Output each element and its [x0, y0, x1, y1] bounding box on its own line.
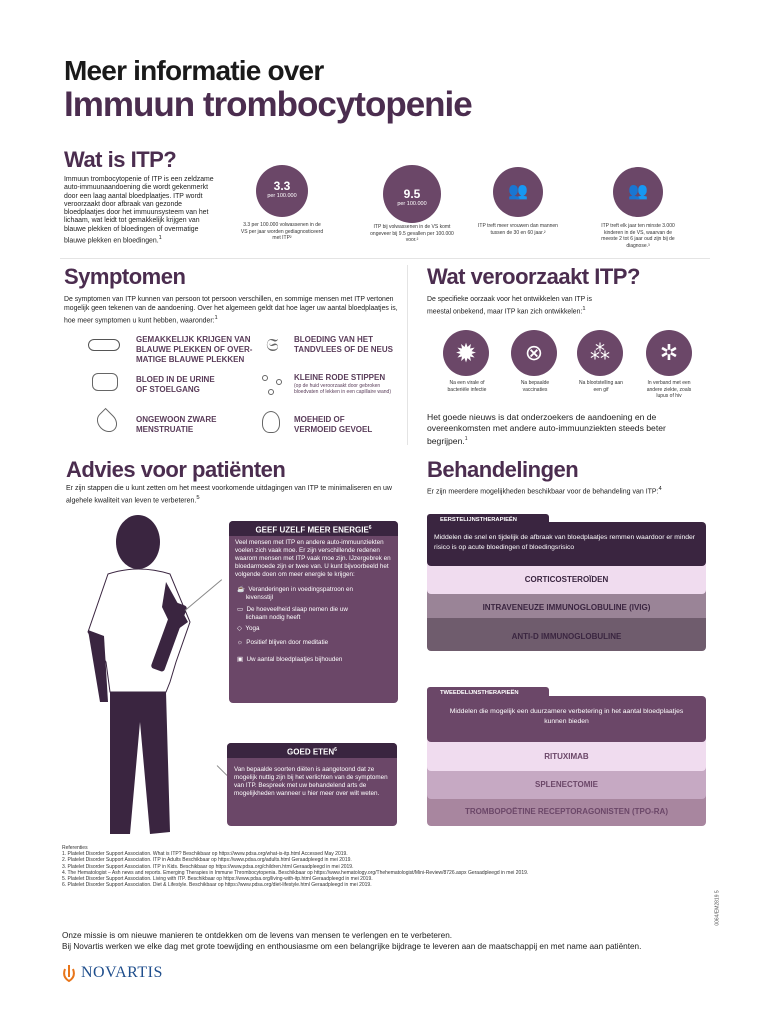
text: ITP definition: Immuun trombocytopenie of ITP is een zeldzame auto-immuunaandoening die wordt gekenmerkt door een laag aantal bloedplaatjes. ITP wordt veroorzaakt door afbraak van gezonde bloedplaatjes door het immuunsysteem van het lichaam, wat leidt tot gemakkelijk krijgen van blauwe plekken of bloedingen of overmatige blauwe plekken en bloedingen.1 — [64, 176, 214, 244]
symptom list — [88, 335, 393, 434]
symptom: tired — [262, 411, 280, 433]
symptom: urine — [92, 373, 118, 391]
energy tips list: ◇ Yoga — [237, 625, 259, 632]
panel: tweedelijnstherapieën: Middelen die mogelijk een duurzamere verbetering in het aantal bloedplaatjes kunnen bieden — [450, 708, 683, 725]
panel: eerstelijnstherapieën — [427, 514, 706, 651]
panel: tweedelijnstherapieën: TROMBOPOËTINE RECEPTORAGONISTEN (TPO-RA) — [465, 807, 668, 816]
panel header: GEEF UZELF MEER ENERGIE6 — [255, 525, 372, 535]
symptom: gums: 𝔖 — [266, 335, 279, 355]
title — [64, 55, 472, 124]
symptom list: OF STOELGANG — [136, 385, 200, 394]
symptom list: ONGEWOON ZWARE — [136, 415, 216, 424]
logo: novartis: NOVARTIS — [81, 964, 163, 981]
vertical code: 0064/EM2819 5 — [715, 890, 721, 926]
panel: tweedelijnstherapieën: SPLENECTOMIE — [535, 780, 598, 789]
energy tips list: ☕ Veranderingen in voedingspatroon en — [237, 586, 353, 593]
symptom list: GEMAKKELIJK KRIJGEN VAN — [136, 335, 251, 344]
symptom list: VERMOEID GEVOEL — [294, 425, 372, 434]
symptom: red dots — [262, 375, 282, 395]
panel body text: Veel mensen met ITP en andere auto-immuunziekten voelen zich vaak moe. Er zijn verschillende redenen waarom mensen met ITP vaak moe zijn. IJzergebrek en bloedarmoede zijn er twee van. U kunt bijvoorbeeld het volgende doen om meer energie te krijgen: — [235, 539, 391, 578]
energy tips list: ▭ De hoeveelheid slaap nemen die uw — [237, 606, 348, 613]
energy tips list — [237, 585, 353, 663]
panel: geef uzelf meer energie — [229, 521, 398, 703]
symptom list: (op de huid veroorzaakt door gebroken bloedvaten of lekken in een capillaire wand) — [294, 383, 391, 395]
cause: vaccination — [511, 330, 557, 392]
tab label: TWEEDELIJNSTHERAPIEËN — [440, 690, 519, 696]
heading: Wat veroorzaakt ITP: Wat veroorzaakt ITP? — [427, 264, 640, 289]
stat: 9.5: per 100.000 — [397, 201, 427, 207]
references: 6. Platelet Disorder Support Association. Diet & Lifestyle. Beschikbaar op https://www.pdsa.org/diet-lifestyle.html Geraadpleegd in mei 2019. — [62, 882, 372, 888]
illustration: person silhouette — [88, 515, 190, 834]
symptom list: BLOED IN DE URINE — [136, 375, 215, 384]
cause: other disease: ✲ — [660, 340, 678, 365]
title: Meer informatie over — [64, 55, 323, 86]
symptom list: MOEHEID OF — [294, 415, 345, 424]
cause: infection — [443, 330, 489, 392]
tab label — [427, 514, 549, 528]
references: 2. Platelet Disorder Support Association. ITP in Adults Beschikbaar op https://www.pdsa.org/adults.html Geraadpleegd in mei 2019. — [62, 857, 352, 863]
mission text: Onze missie is om nieuwe manieren te ontdekken om de levens van mensen te verlengen en te verbeteren. — [62, 931, 452, 940]
stat: women — [478, 167, 558, 236]
heading: Wat is ITP: Wat is ITP? — [64, 147, 176, 172]
stat: children: 👥 — [628, 183, 648, 200]
symptom: bruises — [88, 339, 120, 351]
references: 1. Platelet Disorder Support Association. What is ITP? Beschikbaar op https://www.pdsa.org/what-is-itp.html Accessed May 2019. — [62, 851, 348, 857]
panel: eerstelijnstherapieën: CORTICOSTEROÏDEN — [525, 575, 608, 584]
symptom: menstruation — [93, 408, 121, 436]
panel header: GOED ETEN6 — [287, 747, 337, 757]
text: treatments intro: Er zijn meerdere mogelijkheden beschikbaar voor de behandeling van ITP:4 — [427, 486, 662, 495]
text: good news: Het goede nieuws is dat onderzoekers de aandoening en de overeenkomsten met andere auto-immuunziekten steeds beter begrijpen.1 — [427, 412, 666, 446]
causes icons — [443, 330, 692, 399]
energy tips list: ▣ Uw aantal bloedplaatjes bijhouden — [237, 656, 342, 663]
energy tips list: levensstijl — [246, 594, 273, 601]
panel header — [229, 521, 398, 536]
symptom list: MENSTRUATIE — [136, 425, 193, 434]
heading: Behandelingen: Behandelingen — [427, 457, 578, 482]
tab label: EERSTELIJNSTHERAPIEËN — [440, 517, 517, 523]
text: symptoms intro: De symptomen van ITP kunnen van persoon tot persoon verschillen, en sommige mensen met ITP vertonen mogelijk geen tekenen van de aandoening. Over het algemeen geldt dat hoe lager uw aantal bloedplaatjes is, hoe meer symptomen u kunt hebben, waaronder:1 — [64, 296, 398, 324]
tab label — [427, 687, 549, 701]
stat: children: ITP treft elk jaar ten minste 3.000 kinderen in de VS, waarvan de meeste 2 tot 6 jaar oud zijn bij de diagnose.³ — [601, 223, 675, 248]
cause: poison: ⁂ — [590, 342, 610, 364]
cause: infection: Na een virale of bacteriële infectie — [448, 380, 486, 392]
panel: goed eten — [227, 743, 397, 826]
symptom list: MATIGE BLAUWE PLEKKEN — [136, 355, 244, 364]
references: 4. The Hematologist – Ash news and reports. Emerging Therapies in Immune Thrombocytopenia. Beschikbaar op https://www.hematology.org/Thehematologist/Mini-Review/8726.aspx Geraadpleegd in mei 2019. — [62, 870, 528, 876]
stat: 3.3: 3.3 — [274, 179, 290, 193]
stat: 9.5 — [370, 165, 454, 243]
references — [62, 845, 528, 888]
stat: 3.3: 3.3 per 100.000 volwassenen in de VS per jaar worden gediagnosticeerd met ITP² — [241, 222, 323, 241]
mission text: Bij Novartis werken we elke dag met grote toewijding en enthousiasme om een belangrijke bijdrage te leveren aan de maatschappij en met name aan patiënten. — [62, 942, 641, 950]
references: Referenties — [62, 845, 88, 851]
panel: tweedelijnstherapieën — [427, 687, 706, 826]
energy tips list: ☼ Positief blijven door meditatie — [237, 639, 328, 646]
cause: vaccination: ⊗ — [525, 340, 543, 365]
panel: eerstelijnstherapieën: INTRAVENEUZE IMMUNOGLOBULINE (IVIG) — [483, 603, 650, 612]
stat: women: 👥 — [508, 183, 528, 200]
cause: vaccination: Na bepaalde vaccinaties — [521, 380, 549, 392]
references: 5. Platelet Disorder Support Association. Living with ITP. Beschikbaar op https://www.pdsa.org/living-with-itp.html Geraadpleegd in mei 2019. — [62, 876, 373, 882]
energy tips list: lichaam nodig heeft — [246, 614, 300, 621]
stat: 3.3 — [240, 165, 323, 241]
panel: tweedelijnstherapieën: RITUXIMAB — [544, 752, 589, 761]
cause: other disease: In verband met een andere ziekte, zoals lupus of hiv — [647, 380, 691, 399]
references: 3. Platelet Disorder Support Association. ITP in Kids. Beschikbaar op https://www.pdsa.org/children.html Geraadpleegd in mei 2019. — [62, 864, 353, 870]
cause: other disease — [646, 330, 692, 399]
text: advies intro: Er zijn stappen die u kunt zetten om het meest voorkomende uitdagingen van ITP te minimaliseren en uw algehele kwaliteit van leven te verbeteren.5 — [66, 485, 392, 504]
cause: poison: Na blootstelling aan een gif — [579, 380, 623, 392]
cause: infection: ✹ — [455, 338, 477, 368]
stat: women: ITP treft meer vrouwen dan mannen tussen de 30 en 60 jaar.² — [478, 223, 558, 236]
title: Immuun trombocytopenie — [64, 85, 472, 124]
symptom list: TANDVLEES OF DE NEUS — [294, 345, 393, 354]
heading: Advies: Advies voor patiënten — [66, 457, 285, 482]
mission text — [62, 931, 641, 950]
stat: children — [601, 167, 675, 248]
panel: eerstelijnstherapieën: Middelen die snel en tijdelijk de afbraak van bloedplaatjes remmen waardoor er minder risico is op acute bloedingen of bloedingsrisico — [434, 534, 695, 551]
stat: 9.5: 9.5 — [404, 187, 420, 201]
symptom list: BLOEDING VAN HET — [294, 335, 373, 344]
panel: eerstelijnstherapieën: ANTI-D IMMUNOGLOBULINE — [512, 632, 621, 641]
text: causes intro: De specifieke oorzaak voor het ontwikkelen van ITP is meestal onbekend, maar ITP kan zich ontwikkelen:1 — [427, 296, 592, 315]
stat: 3.3: per 100.000 — [267, 193, 297, 199]
panel body: Van bepaalde soorten diëten is aangetoond dat ze mogelijk nuttig zijn bij het verlichten van de symptomen van ITP. Bespreek met uw behandelend arts de mogelijkheden wanneer u hier meer over wilt weten. — [234, 766, 388, 797]
symptom list: KLEINE RODE STIPPEN — [294, 373, 385, 382]
cause: poison — [577, 330, 623, 392]
symptom list: BLAUWE PLEKKEN OF OVER- — [136, 345, 252, 354]
stat: 9.5: ITP bij volwassenen in de VS komt ongeveer bij 9.5 gevallen per 100.000 voor.² — [370, 224, 454, 243]
panel header — [227, 743, 397, 758]
heading: Symptomen: Symptomen — [64, 264, 185, 289]
